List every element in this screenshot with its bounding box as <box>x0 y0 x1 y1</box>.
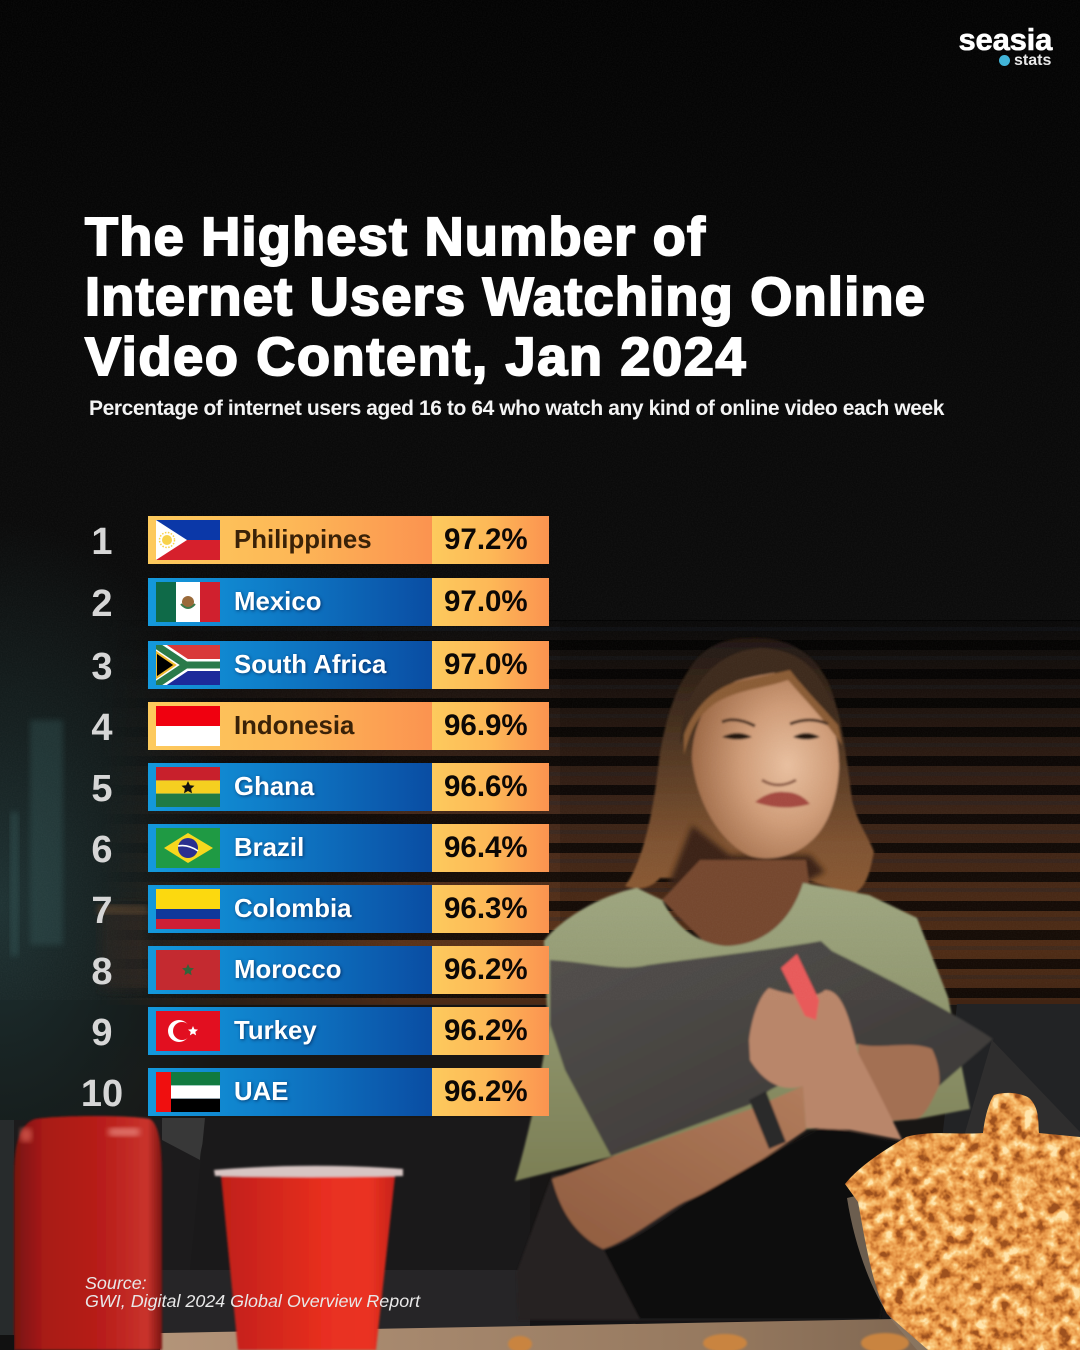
name bar <box>148 824 432 872</box>
rank 6: 6 <box>91 829 113 871</box>
source note: Source: <box>85 1273 147 1293</box>
row 10: UAE <box>81 1068 549 1116</box>
flag: Turkey <box>156 1011 220 1051</box>
value cell <box>432 763 549 811</box>
row 1: Philippines <box>91 516 549 564</box>
film grain <box>0 0 1080 1000</box>
rank 5: 5 <box>91 768 113 810</box>
title: Internet Users Watching Online <box>85 267 926 327</box>
woman <box>515 638 993 1320</box>
name bar <box>148 763 432 811</box>
eyebrows, eyes <box>722 720 828 726</box>
flag: Morocco <box>156 950 220 990</box>
flag: Mexico <box>156 582 220 622</box>
name bar <box>148 1068 432 1116</box>
country name: Ghana <box>234 773 314 801</box>
row 2: Mexico <box>91 578 549 626</box>
country name: Indonesia <box>234 712 354 740</box>
value: 97.2% <box>444 523 528 556</box>
red can <box>14 1116 162 1350</box>
name bar <box>148 1007 432 1055</box>
body under arm <box>517 1145 905 1320</box>
country name: Colombia <box>234 895 352 923</box>
title <box>84 207 926 387</box>
value: 97.0% <box>444 648 528 681</box>
fringe <box>680 648 838 745</box>
country name: Philippines <box>234 526 372 554</box>
flag: Ghana <box>156 767 220 807</box>
value cell <box>432 641 549 689</box>
sofa <box>0 1004 1080 1340</box>
rank 9: 9 <box>91 1012 113 1054</box>
value cell <box>432 702 549 750</box>
row 3: South Africa <box>91 641 549 689</box>
name bar <box>148 885 432 933</box>
mouth <box>755 792 810 808</box>
pillow <box>550 941 993 1156</box>
rank 4: 4 <box>91 707 113 749</box>
country name: South Africa <box>234 651 386 679</box>
value cell <box>432 516 549 564</box>
table crumbs <box>508 1333 909 1350</box>
upper arm and forearm <box>552 1086 806 1249</box>
row 7: Colombia <box>91 885 549 933</box>
logo: seasia stats <box>958 22 1053 69</box>
name bar <box>148 641 432 689</box>
rank 2: 2 <box>91 583 113 625</box>
row 5: Ghana <box>91 763 549 811</box>
black trousers <box>604 1126 904 1319</box>
name bar <box>148 946 432 994</box>
nose <box>762 780 796 785</box>
value cell <box>432 1068 549 1116</box>
name bar <box>148 516 432 564</box>
country name: UAE <box>234 1078 288 1106</box>
rank 3: 3 <box>91 646 113 688</box>
table <box>160 1319 1080 1350</box>
phone <box>781 954 819 1020</box>
rank 10: 10 <box>81 1073 123 1115</box>
country name: Brazil <box>234 834 304 862</box>
rank 8: 8 <box>91 951 113 993</box>
value: 96.2% <box>444 1014 528 1047</box>
flag: South Africa <box>156 645 220 685</box>
value: 96.4% <box>444 831 528 864</box>
hair <box>625 638 874 894</box>
popcorn bowl <box>845 1093 1080 1350</box>
logo sublabel: stats <box>1014 52 1051 69</box>
rank 1: 1 <box>91 521 113 563</box>
flag: UAE <box>156 1072 220 1112</box>
t-shirt <box>515 883 970 1181</box>
value cell <box>432 578 549 626</box>
face <box>692 672 839 858</box>
floor strip under can <box>0 1335 14 1350</box>
window blinds on back wall <box>100 620 1080 1005</box>
value cell <box>432 946 549 994</box>
value: 97.0% <box>444 585 528 618</box>
flag: Brazil <box>156 828 220 868</box>
rank 7: 7 <box>91 890 113 932</box>
value: 96.2% <box>444 953 528 986</box>
source note <box>85 1273 421 1311</box>
source note: GWI, Digital 2024 Global Overview Report <box>85 1291 420 1311</box>
value: 96.2% <box>444 1075 528 1108</box>
value: 96.3% <box>444 892 528 925</box>
red cup <box>214 1166 403 1350</box>
row 4: Indonesia <box>91 702 549 750</box>
value cell <box>432 885 549 933</box>
title: Video Content, Jan 2024 <box>85 327 747 387</box>
value: 96.6% <box>444 770 528 803</box>
fringe tips <box>684 670 842 755</box>
row 8: Morocco <box>91 946 549 994</box>
flag: Colombia <box>156 889 220 929</box>
logo dot <box>999 55 1010 66</box>
name bar <box>148 702 432 750</box>
neck <box>662 860 812 948</box>
hair shadow by neck <box>668 825 825 885</box>
flag: Indonesia <box>156 706 220 746</box>
row 6: Brazil <box>91 824 549 872</box>
flag: Philippines <box>156 520 220 560</box>
teal glow on left wall with window reflection <box>0 520 400 1140</box>
value: 96.9% <box>444 709 528 742</box>
watch <box>749 1091 786 1149</box>
value cell <box>432 824 549 872</box>
logo wordmark: seasia <box>958 22 1052 57</box>
name bar <box>148 578 432 626</box>
country name: Turkey <box>234 1017 317 1045</box>
country name: Mexico <box>234 588 321 616</box>
other hand <box>858 1044 939 1121</box>
title: The Highest Number of <box>85 207 706 267</box>
country name: Morocco <box>234 956 342 984</box>
row 9: Turkey <box>91 1007 549 1055</box>
value cell <box>432 1007 549 1055</box>
subtitle: Percentage of internet users aged 16 to 64 who watch any kind of online video each week <box>89 397 944 420</box>
hand and wrist <box>749 988 902 1140</box>
